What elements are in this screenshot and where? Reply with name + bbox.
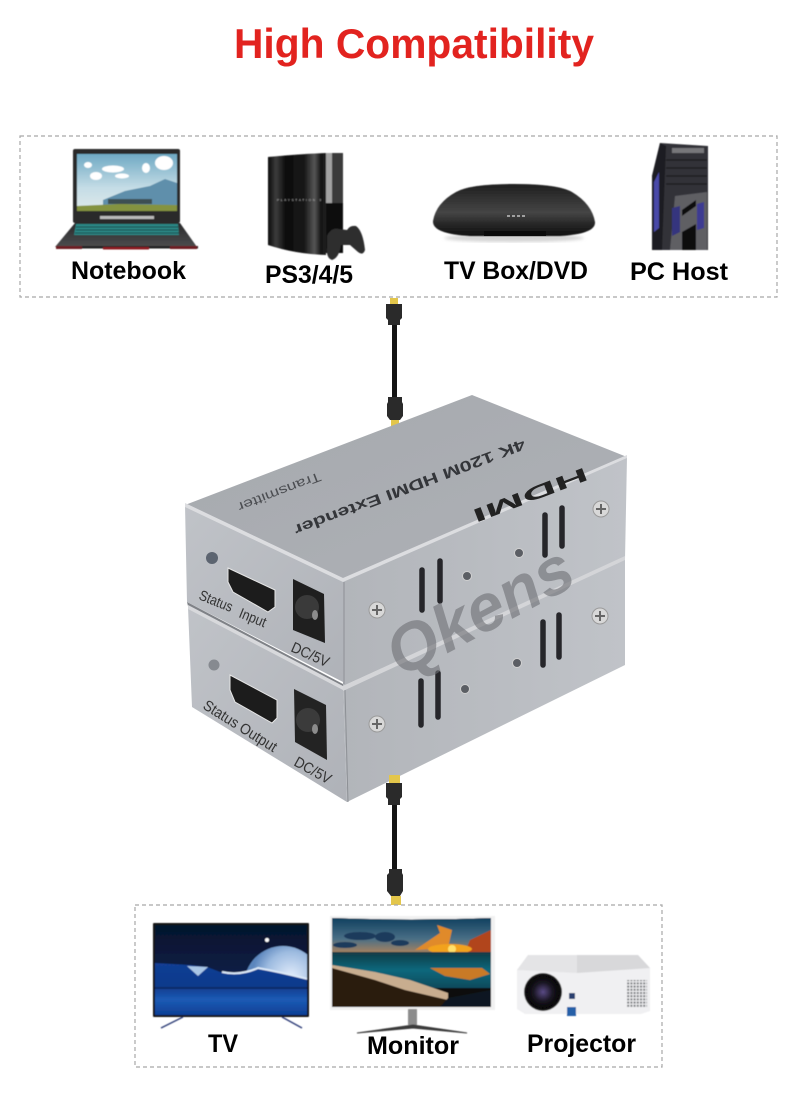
seam between units xyxy=(187,556,625,691)
port text: Input: Input xyxy=(237,606,268,631)
icon: PS3 console: PLAYSTATION 3 xyxy=(277,198,321,202)
title: High Compatibility xyxy=(234,20,595,67)
top text: HDMI logo: HDMI xyxy=(469,462,591,526)
label: Projector: Projector xyxy=(527,1030,636,1058)
HDMI output port xyxy=(230,675,277,723)
watermark: Qkens xyxy=(373,530,586,690)
transmitter unit (top) xyxy=(185,395,627,686)
label: PS3/4/5: PS3/4/5 xyxy=(265,261,353,289)
DC power jack xyxy=(294,689,327,760)
label: PC Host: PC Host xyxy=(630,258,729,286)
panel: source devices xyxy=(20,136,777,297)
port text: Status: Status xyxy=(197,588,235,616)
product: HDMI extender stack xyxy=(185,395,627,802)
receiver unit (bottom) xyxy=(188,558,625,802)
status LED xyxy=(208,660,220,670)
status LED xyxy=(206,552,218,564)
icon: PS3 console xyxy=(268,153,365,260)
icon: TV xyxy=(153,923,322,1028)
port text: DC/5V: DC/5V xyxy=(288,639,332,671)
side vents and screws xyxy=(369,608,608,732)
label: TV Box/DVD: TV Box/DVD xyxy=(444,257,588,285)
panel: display devices xyxy=(135,905,662,1067)
DC power jack xyxy=(293,579,325,643)
icon: PC tower xyxy=(652,143,708,250)
top HDMI cable xyxy=(386,298,403,428)
port text: Status Output: Status Output xyxy=(200,697,281,756)
side vents and screws xyxy=(369,501,609,618)
icon: TV box xyxy=(433,184,595,242)
top text: product name: 4K 120M HDMI Extender xyxy=(291,435,528,538)
bottom HDMI cable xyxy=(386,775,403,905)
panel border xyxy=(20,136,777,297)
label: Notebook: Notebook xyxy=(71,257,186,285)
icon: notebook xyxy=(55,149,198,250)
top text: Transmitter: Transmitter xyxy=(235,469,323,515)
label: Monitor: Monitor xyxy=(367,1032,459,1060)
icon: monitor xyxy=(330,916,495,1033)
label: TV: TV xyxy=(208,1030,238,1058)
panel border xyxy=(135,905,662,1067)
port text: DC/5V: DC/5V xyxy=(291,754,334,788)
HDMI input port xyxy=(228,568,275,612)
icon: projector xyxy=(517,955,650,1016)
